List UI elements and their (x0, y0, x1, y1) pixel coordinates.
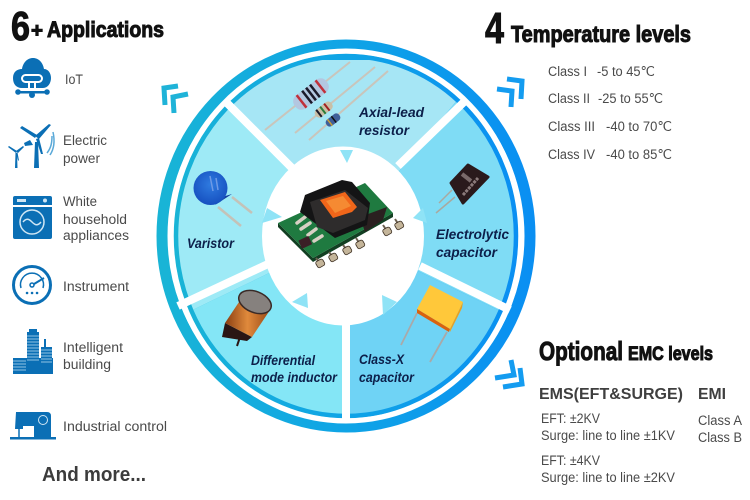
label: Electrolytic capacitor (436, 227, 509, 260)
row: Class II: -25 to 55℃ (598, 91, 663, 106)
segment: electrolytic capacitor (399, 99, 515, 310)
row: Class I (548, 64, 655, 79)
heading: 4 Temperature levels: 4 (485, 4, 504, 53)
outer ring (162, 45, 530, 427)
application: Electric power: power (63, 151, 100, 166)
subheading: EMS: EMS(EFT&SURGE) (539, 386, 683, 403)
application: Industrial control (10, 412, 167, 440)
arrow: upper-right chevrons (497, 79, 522, 107)
label: Differential mode inductor: Differential (251, 353, 315, 368)
row: Class III: -40 to 70℃ (606, 119, 672, 134)
segment: class-X capacitor (350, 271, 498, 418)
application: White household appliances: White (63, 194, 97, 209)
row: Class I: Class I (548, 64, 587, 79)
subheading: EMI: EMI (698, 386, 726, 403)
row: Class IV: -40 to 85℃ (606, 147, 672, 162)
segment rim (176, 56, 516, 416)
component: electrolytic capacitor (436, 165, 488, 213)
row: Class IV (548, 147, 672, 162)
segments (174, 58, 518, 418)
pcb (278, 213, 393, 262)
EMS levels: EFT: ±4KV (541, 453, 600, 468)
arrow: upper-left chevrons (164, 86, 188, 113)
heading: 4 Temperature levels (485, 4, 691, 53)
top pins (297, 217, 322, 241)
small component (298, 236, 312, 249)
label: Electrolytic capacitor: capacitor (436, 245, 498, 260)
EMI levels: Class B (698, 430, 742, 445)
segment: differential mode inductor (193, 273, 342, 418)
EMS levels: Surge: line to line ±1KV (541, 428, 675, 443)
heading: Optional EMC levels: EMC levels (628, 344, 713, 365)
application: Intelligent building (13, 329, 123, 374)
flange (360, 207, 387, 232)
EMI levels: Class A (698, 413, 742, 428)
label: Differential mode inductor (251, 353, 338, 385)
heading: 4 Temperature levels: Temperature levels (511, 21, 691, 47)
hub (262, 146, 424, 326)
label: Class-X capacitor: capacitor (359, 370, 415, 385)
application: Electric power: Electric (63, 133, 107, 148)
application: White household appliances: appliances (63, 228, 129, 243)
front pins (316, 219, 399, 263)
component: axial-lead resistors (265, 62, 388, 140)
row: Class I: -5 to 45℃ (597, 64, 655, 79)
temperature class list (548, 64, 672, 162)
heading: 6+ Applications (11, 3, 164, 49)
segment: varistor (178, 110, 288, 310)
application: Instrument: Instrument (63, 279, 129, 294)
row: Class III: Class III (548, 119, 595, 134)
row: Class II (548, 91, 663, 106)
application: IoT (13, 58, 83, 98)
application: White household appliances (13, 194, 129, 243)
white dividers (178, 100, 510, 421)
transformer (300, 180, 370, 238)
label: Axial-lead resistor: resistor (359, 123, 410, 138)
application: Industrial control: Industrial control (63, 419, 167, 434)
icon: sewing machine (10, 412, 56, 440)
heading: Optional EMC levels: Optional (539, 336, 623, 366)
icon: cloud network (13, 58, 51, 98)
circular diagram (156, 40, 536, 432)
icon: washing machine (13, 196, 52, 239)
EMS levels (541, 411, 675, 485)
segment: axial-lead resistor (234, 60, 456, 172)
label: Axial-lead resistor: Axial-lead (358, 105, 425, 120)
label: Axial-lead resistor (358, 105, 425, 138)
icon: buildings (13, 329, 53, 374)
row: Class IV: Class IV (548, 147, 595, 162)
text: And more: And more... (42, 464, 146, 486)
EMS levels: Surge: line to line ±2KV (541, 470, 675, 485)
heading: 6+ Applications: Applications (47, 17, 164, 42)
row: Class II: Class II (548, 91, 590, 106)
application: White household appliances: household (63, 212, 127, 227)
heading: Optional EMC levels (539, 336, 713, 366)
EMI levels (698, 413, 742, 445)
icon: wind turbines (8, 124, 54, 168)
component: power module (278, 180, 404, 268)
application: Intelligent building: Intelligent (63, 340, 123, 355)
component: differential mode inductor (222, 286, 275, 346)
heading: 6+ Applications: + (31, 20, 43, 42)
label: Differential mode inductor: mode inductor (251, 370, 338, 385)
application: Intelligent building: building (63, 357, 111, 372)
heading: 6+ Applications: 6 (11, 3, 30, 49)
application: IoT: IoT (65, 72, 83, 87)
component: class-X capacitor (401, 285, 463, 362)
hub pointers (262, 150, 427, 315)
label: Varistor: Varistor (187, 236, 235, 251)
row: Class III (548, 119, 672, 134)
icon: gauge (14, 266, 50, 304)
label: Electrolytic capacitor: Electrolytic (436, 227, 509, 242)
label: Class-X capacitor: Class-X (359, 352, 405, 367)
label: Class-X capacitor (359, 352, 415, 385)
EMS levels: EFT: ±2KV (541, 411, 600, 426)
component: varistor (194, 171, 252, 226)
application: Instrument (14, 266, 129, 304)
application: Electric power (8, 124, 107, 168)
orange coil (320, 192, 357, 218)
arrow: lower-right chevrons (495, 360, 522, 387)
